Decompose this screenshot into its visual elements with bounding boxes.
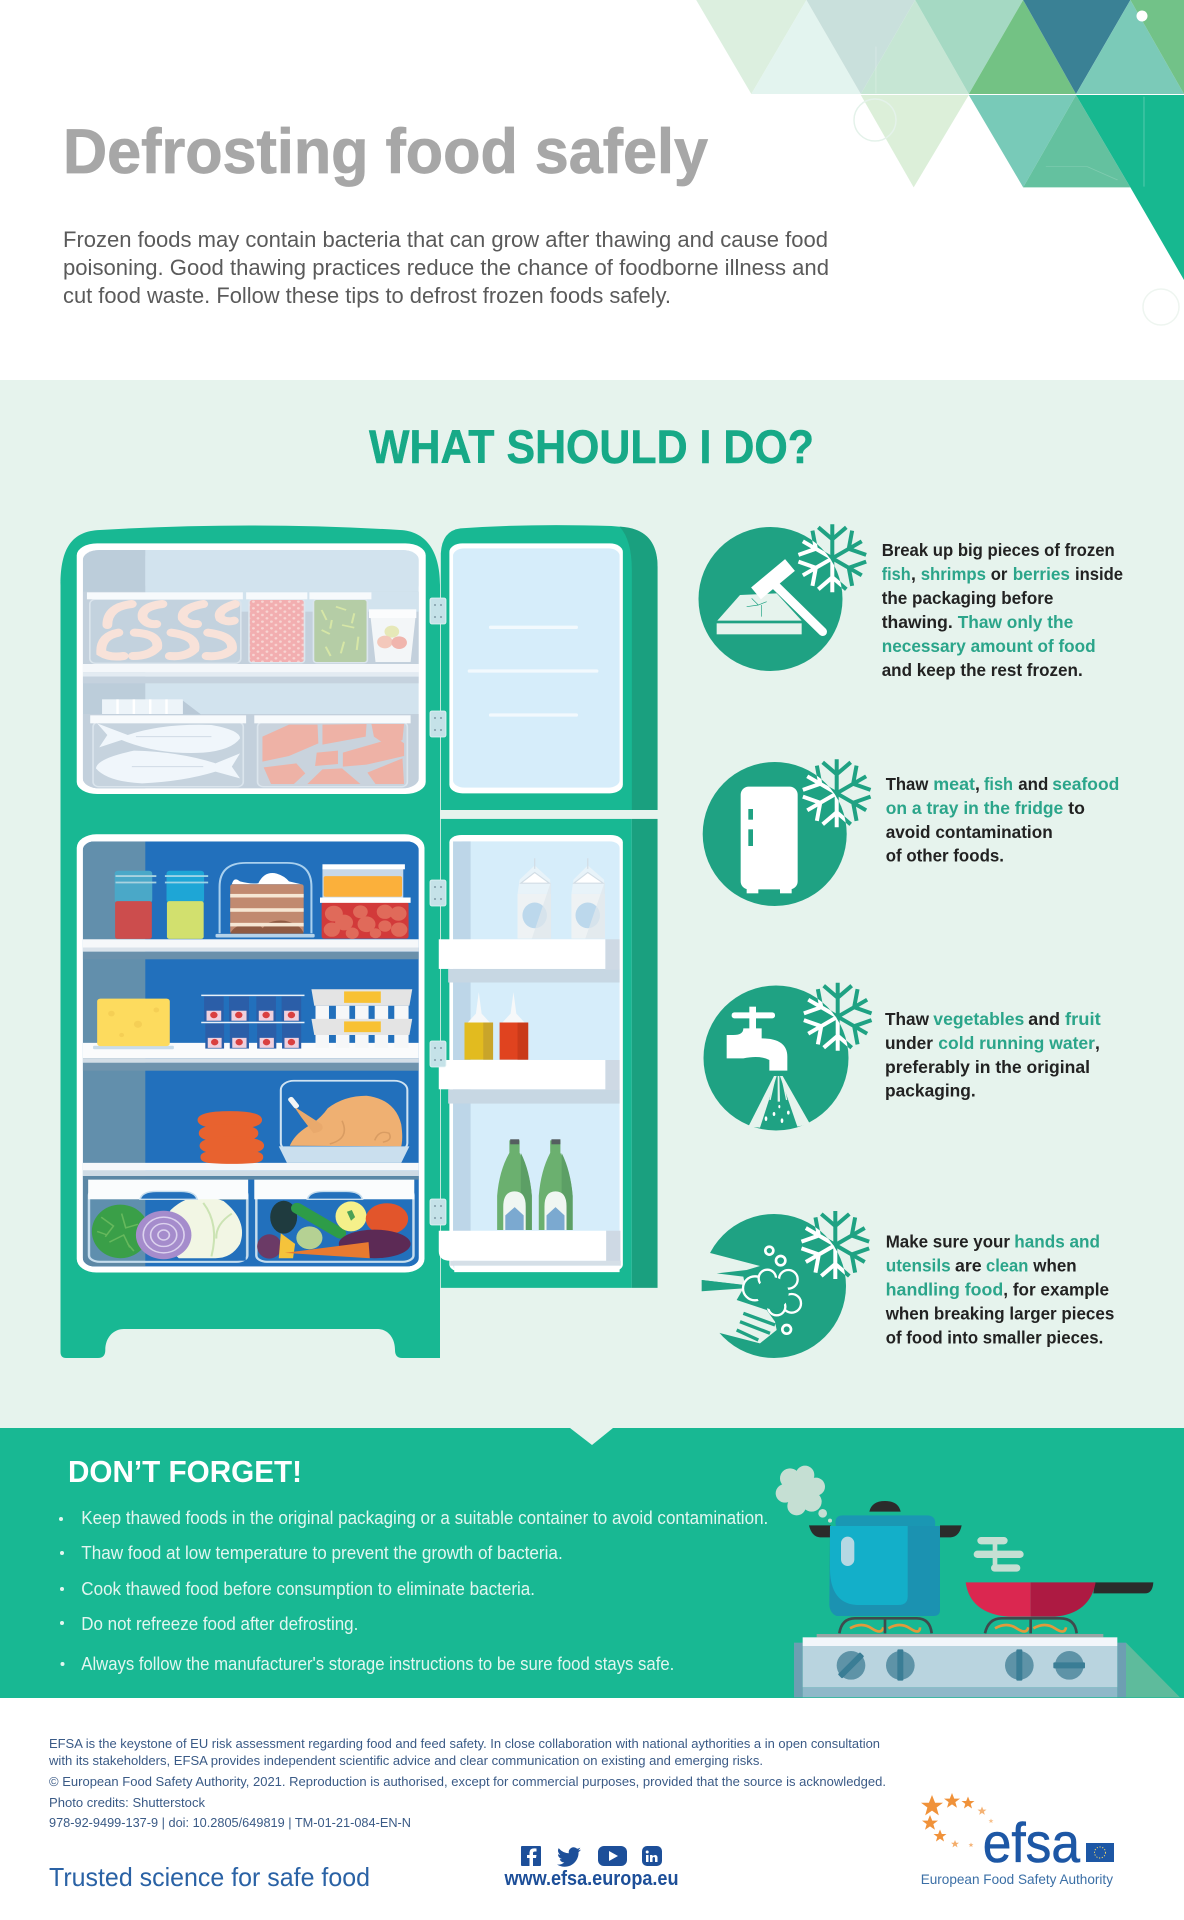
red berries container bbox=[320, 897, 411, 939]
sausages bbox=[203, 1116, 259, 1159]
tip 1 text: inside bbox=[1075, 564, 1123, 584]
tip 3 text: , bbox=[1095, 1033, 1100, 1053]
water bottles bbox=[497, 1139, 573, 1230]
ice tray bbox=[102, 699, 201, 715]
efsa logo bbox=[921, 1793, 1114, 1887]
tip 3 text: Thaw bbox=[885, 1009, 929, 1029]
cheese bbox=[93, 999, 174, 1049]
illustration: stove with pot and pan bbox=[776, 1466, 1180, 1697]
shrimp box bbox=[87, 592, 243, 663]
logo stars bbox=[921, 1793, 994, 1847]
icon: twitter bbox=[557, 1847, 581, 1867]
cooktop bbox=[794, 1634, 1180, 1697]
icon: facebook bbox=[521, 1846, 541, 1866]
tip 4 text: , for example bbox=[1003, 1280, 1109, 1300]
website url: www.efsa.europa.eu bbox=[504, 1868, 678, 1890]
tip 1 text: and keep the rest frozen. bbox=[882, 660, 1083, 680]
tip 2: thaw in the fridge bbox=[703, 759, 1124, 906]
tip 3 text: and bbox=[1028, 1009, 1060, 1029]
frozen green beans box bbox=[309, 592, 371, 663]
title: Defrosting food safely bbox=[63, 117, 708, 187]
footer legal text: Photo credits: Shutterstock bbox=[49, 1795, 205, 1810]
tip 4 text: are bbox=[955, 1256, 982, 1276]
cake under dome bbox=[216, 863, 315, 937]
tip 3: cold running water bbox=[704, 983, 1105, 1130]
pot bbox=[809, 1501, 962, 1616]
egg cartons bbox=[311, 989, 412, 1048]
intro text: Frozen foods may contain bacteria that can grow after thawing and cause food bbox=[63, 227, 828, 252]
intro text bbox=[63, 227, 829, 308]
footer legal text: 978-92-9499-137-9 | doi: 10.2805/649819 | TM-01-21-084-EN-N bbox=[49, 1815, 411, 1830]
tip 2 text: seafood bbox=[1052, 774, 1119, 794]
tip 1 text: or bbox=[991, 564, 1008, 584]
tip 3 text: preferably in the original bbox=[885, 1057, 1090, 1077]
footer legal text: © European Food Safety Authority, 2021. Reproduction is authorised, except for commercial purposes, provided that the source is acknowledged. bbox=[49, 1774, 886, 1789]
tip 2 text: , bbox=[975, 774, 980, 794]
tagline: Trusted science for safe food bbox=[49, 1862, 370, 1892]
tip 3 text: fruit bbox=[1065, 1009, 1101, 1029]
tip 2 text: to bbox=[1068, 798, 1085, 818]
tip 1 text: fish bbox=[882, 564, 911, 584]
panel: what should I do background bbox=[0, 380, 1184, 1428]
orange food container bbox=[322, 864, 405, 897]
bullet list: Thaw food at low temperature to prevent the growth of bacteria. bbox=[81, 1542, 563, 1563]
tip 4 text: when breaking larger pieces bbox=[885, 1304, 1115, 1324]
tip 1 text: Break up big pieces of frozen bbox=[882, 540, 1115, 560]
EU flag bbox=[1086, 1843, 1114, 1862]
social media icons bbox=[521, 1846, 662, 1867]
tip 1 text: the packaging before bbox=[882, 588, 1054, 608]
tip 1 text: necessary amount of food bbox=[882, 636, 1096, 656]
fridge compartment bbox=[77, 834, 424, 1272]
frozen fruit cup bbox=[369, 609, 416, 662]
bullet list: Keep thawed foods in the original packaging or a suitable container to avoid contamination. bbox=[81, 1507, 768, 1528]
header triangle pattern bbox=[696, 0, 1184, 280]
freezer compartment bbox=[77, 543, 426, 794]
notch pointer bbox=[570, 1428, 613, 1445]
footer legal text: with its stakeholders, EFSA provides independent scientific advice and clear communication on existing and emerging risks. bbox=[48, 1753, 763, 1768]
panel: don't forget band bbox=[0, 1428, 1184, 1698]
burners bbox=[839, 1618, 1077, 1633]
icon: washing hands bbox=[697, 1211, 872, 1358]
icon: tap bbox=[704, 983, 874, 1130]
tip 1: break up big pieces bbox=[698, 524, 1127, 680]
vegetable drawer right bbox=[254, 1180, 414, 1262]
tip 4 text: clean bbox=[986, 1256, 1028, 1276]
tip 4: clean hands and utensils bbox=[697, 1211, 1119, 1358]
logo caption: European Food Safety Authority bbox=[921, 1871, 1113, 1887]
tip 2 text: and bbox=[1018, 774, 1048, 794]
intro text: cut food waste. Follow these tips to defrost frozen foods safely. bbox=[63, 283, 671, 308]
tip 3 text: cold running water bbox=[938, 1033, 1095, 1053]
steam cloud bbox=[776, 1466, 832, 1523]
lower door bbox=[439, 819, 658, 1288]
fish box bbox=[90, 715, 246, 787]
header white dot bbox=[1136, 10, 1148, 22]
heading: don't forget: DON’T FORGET! bbox=[68, 1454, 302, 1489]
footer legal text bbox=[48, 1736, 886, 1830]
roast chicken under dome bbox=[279, 1081, 409, 1163]
tip 2 text: Thaw bbox=[886, 774, 929, 794]
tip 2 text: of other foods. bbox=[886, 846, 1004, 866]
tip 1 text: berries bbox=[1013, 564, 1070, 584]
tip 3 text: under bbox=[885, 1033, 933, 1053]
tip 4 text: of food into smaller pieces. bbox=[886, 1327, 1103, 1347]
intro text: poisoning. Good thawing practices reduce the chance of foodborne illness and bbox=[63, 255, 829, 280]
illustration: open fridge bbox=[60, 525, 658, 1358]
upper door bbox=[441, 525, 658, 819]
header faint circuit circles bbox=[854, 99, 1179, 325]
juice jars bbox=[115, 871, 208, 939]
tip 4 text: when bbox=[1032, 1256, 1077, 1276]
milk cartons bbox=[518, 858, 605, 939]
frozen berries box bbox=[246, 592, 307, 663]
icon: youtube bbox=[598, 1846, 627, 1866]
frying pan bbox=[966, 1582, 1153, 1617]
door shelf 1 bbox=[439, 939, 620, 982]
tip 4 text: utensils bbox=[886, 1256, 951, 1276]
tip 2 text: meat bbox=[933, 774, 975, 794]
bullet list bbox=[59, 1507, 768, 1674]
meat box bbox=[254, 715, 411, 787]
bullet list: Always follow the manufacturer's storage instructions to be sure food stays safe. bbox=[81, 1653, 674, 1674]
bullet list: Do not refreeze food after defrosting. bbox=[81, 1613, 358, 1634]
tip 2 text: avoid contamination bbox=[886, 822, 1053, 842]
heading: what should I do: WHAT SHOULD I DO? bbox=[369, 420, 814, 473]
icon: hammer on frozen block bbox=[698, 524, 869, 671]
tip 2 text: fish bbox=[984, 774, 1013, 794]
tip 4 text: hands and bbox=[1014, 1232, 1100, 1252]
sauce bottles bbox=[464, 992, 528, 1060]
logo wordmark: efsa bbox=[983, 1811, 1081, 1874]
tip 1 text: thawing. bbox=[882, 612, 953, 632]
door shelf 2 bbox=[439, 1060, 620, 1104]
pan steam bbox=[977, 1541, 1020, 1568]
tip 1 text: , bbox=[911, 564, 916, 584]
vegetable drawer left bbox=[88, 1180, 248, 1262]
icon: linkedin bbox=[642, 1846, 662, 1866]
tip 1 text: shrimps bbox=[921, 564, 986, 584]
tip 4 text: Make sure your bbox=[886, 1232, 1010, 1252]
icon: fridge bbox=[703, 759, 873, 906]
tip 3 text: packaging. bbox=[885, 1081, 976, 1101]
door shelf 3 bbox=[439, 1231, 621, 1272]
door hinges bbox=[430, 598, 446, 1225]
yogurt pots bbox=[201, 995, 304, 1049]
footer legal text: EFSA is the keystone of EU risk assessment regarding food and feed safety. In close collaboration with national aythorities a in open consultation bbox=[49, 1736, 880, 1751]
tip 2 text: on a tray in the fridge bbox=[886, 798, 1064, 818]
tip 4 text: handling food bbox=[886, 1280, 1003, 1300]
fridge body bbox=[60, 526, 440, 1358]
bullet list: Cook thawed food before consumption to eliminate bacteria. bbox=[81, 1578, 535, 1599]
tip 1 text: Thaw only the bbox=[958, 612, 1074, 632]
tip 3 text: vegetables bbox=[933, 1009, 1025, 1029]
